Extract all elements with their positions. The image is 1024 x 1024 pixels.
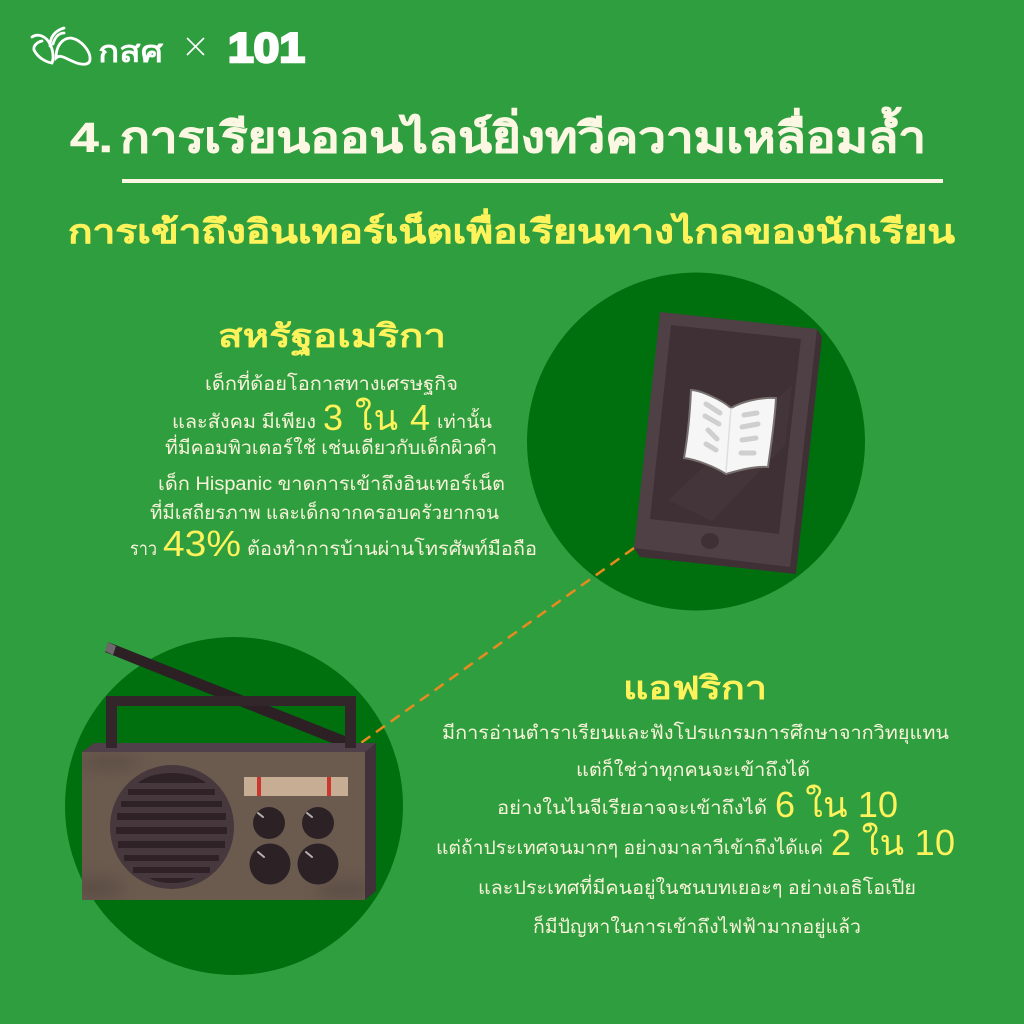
heading: United States: สหรัฐอเมริกา [218,318,446,357]
body text: Africa: ก็มีปัญหาในการเข้าถึงไฟฟ้ามากอยู่แล้ว [533,914,861,938]
circle backdrop: tablet [527,272,865,610]
tuner dial [244,777,348,796]
body text: United States: ที่มีคอมพิวเตอร์ใช้ เช่นเดียวกับเด็กผิวดำ [165,434,497,459]
radio wear shading [82,757,364,898]
body text: United States: 43% [163,523,241,564]
body text: Africa: 2 ใน 10 [831,822,955,863]
title: 4. [70,114,113,161]
icon: leaf logo [32,28,90,64]
body text: Africa: มีการอ่านตำราเรียนและฟังโปรแกรมการศึกษาจากวิทยุแทน [442,721,949,745]
title [70,106,926,161]
body text: United States: เด็ก Hispanic ขาดการเข้าถึงอินเทอร์เน็ต [158,471,505,495]
antenna [105,642,350,749]
body text: United States [130,370,537,564]
body text: Africa: แต่ถ้าประเทศจนมากๆ อย่างมาลาวีเข้าถึงได้แค่ [436,837,823,859]
circle backdrop: radio [65,637,403,975]
body text: United States: และสังคม มีเพียง [172,411,316,433]
title: การเรียนออนไลน์ยิ่งทวีความเหลื่อมล้ำ [120,106,926,161]
handle [106,696,356,748]
open book [684,390,776,474]
body text: Africa: แต่ก็ใช่ว่าทุกคนจะเข้าถึงได้ [576,757,810,782]
title divider [122,179,943,183]
body text: Africa: อย่างในไนจีเรียอาจจะเข้าถึงได้ [497,797,767,819]
logo text: partner name: กสศ [98,36,163,69]
home button [701,533,719,549]
body text: United States: ราว [130,539,157,560]
speaker [110,765,234,889]
body text: United States: 3 ใน 4 [323,397,430,438]
icon: radio [67,642,376,900]
body text: Africa [436,721,955,938]
body text: Africa: 6 ใน 10 [775,784,898,825]
body text: United States: ต้องทำการบ้านผ่านโทรศัพท์มือถือ [247,537,537,560]
subtitle: การเข้าถึงอินเทอร์เน็ตเพื่อเรียนทางไกลของนักเรียน [68,208,956,250]
panel: United States text [130,318,537,564]
body text: United States: เท่านั้น [437,408,492,433]
dashed connector arrow [358,548,634,745]
body text: Africa: และประเทศที่มีคนอยู่ในชนบทเยอะๆ อย่างเอธิโอเปีย [478,874,916,899]
radio front [82,752,365,900]
logo row [32,24,305,71]
radio side [365,743,376,900]
logo cross [187,38,204,55]
knobs [250,807,338,884]
heading: Africa: แอฟริกา [623,670,767,706]
tablet screen [650,325,801,534]
icon: tablet with book [634,312,822,574]
body text: United States: ที่มีเสถียรภาพ และเด็กจากครอบครัวยากจน [150,499,499,524]
radio top [82,743,376,752]
body text: United States: เด็กที่ด้อยโอกาสทางเศรษฐกิจ [205,370,458,395]
panel: Africa text [436,670,955,938]
logo text: 101: 101 [228,24,305,71]
